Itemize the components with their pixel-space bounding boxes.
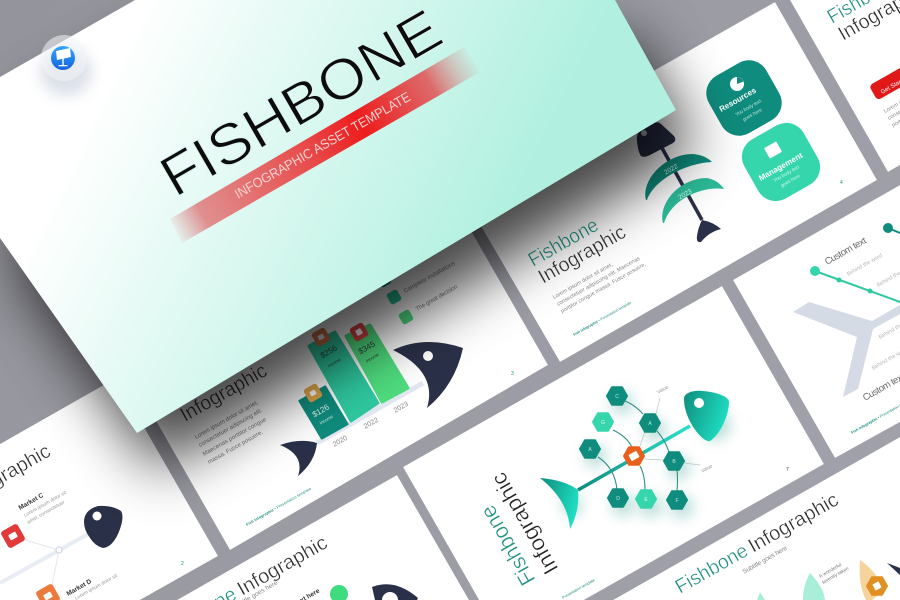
heading: fishbone infographic: Infographic <box>535 221 630 288</box>
heading: fishbone: Fishbone <box>672 540 752 598</box>
management description: You body text <box>772 164 801 184</box>
peach fin <box>860 560 885 600</box>
mint fin large <box>803 573 825 600</box>
text block: bar chart lorem: consectetuer adipiscing elit. <box>198 408 264 449</box>
check text: the great decision: The great decision <box>415 284 459 313</box>
behind the word labels: Behind the word <box>846 253 884 278</box>
heading: bottom slide infographic: Infographic <box>234 532 331 600</box>
bar 2020 <box>300 383 347 438</box>
text block: bar chart lorem <box>194 400 268 466</box>
panel: slide 2 markets <box>0 378 218 600</box>
teal branch <box>883 223 900 233</box>
bar 2023 <box>346 322 408 402</box>
fish head <box>84 506 122 548</box>
icon: 2022 <box>312 328 330 346</box>
footer: Fish Infographic • Presentation template <box>573 301 632 337</box>
management label: Management <box>757 151 805 183</box>
description: serenity taken <box>821 566 850 586</box>
panel: slide top right get started <box>790 0 900 172</box>
fish eye <box>641 130 647 136</box>
check item 3 <box>398 309 414 325</box>
hexagon d <box>608 489 628 507</box>
income 2020: income <box>319 414 334 425</box>
resources label: Resources <box>718 86 758 114</box>
icon: 2020 <box>304 384 322 402</box>
hexagon g light: G <box>601 420 605 426</box>
value 126: $126 <box>311 402 331 419</box>
hexagon a left <box>580 440 600 458</box>
footer: Presentation template <box>562 578 596 600</box>
label 2023: 2023 <box>677 188 694 201</box>
icon: 2023 <box>349 322 369 342</box>
fish head <box>393 342 463 408</box>
heading: fishbone infographic: Fishbone <box>525 214 602 271</box>
fish eye <box>92 512 102 520</box>
hexagon f: F <box>675 498 679 504</box>
text block: lorem ipsum: porttitor congue massa. Fusce posuere, <box>560 261 648 315</box>
page number 4: 4 <box>840 180 843 186</box>
resources description: goes here <box>742 107 764 123</box>
fish head <box>684 391 729 441</box>
footer: Fish Infographic • Presentation template <box>246 487 312 527</box>
subtitle: Subtitle goes here <box>742 545 789 576</box>
panel: slide 7 hexagon fishbone <box>403 286 824 600</box>
green branch <box>810 266 900 302</box>
fish head <box>372 584 418 600</box>
fish eye <box>423 351 433 361</box>
fish head <box>637 122 675 157</box>
heading: bar chart slide: Infographic <box>177 360 271 426</box>
hexagon b: B <box>672 459 676 465</box>
subtitle: INFOGRAPHIC ASSET TEMPLATE <box>232 89 413 202</box>
fish eye <box>694 398 704 408</box>
text block: bar chart lorem: Maecenas porttitor congue <box>202 417 268 458</box>
year labels: 2023 <box>393 401 410 415</box>
market d <box>35 573 119 600</box>
market c text: amet, consectetuer <box>26 499 66 526</box>
hexagon e light: E <box>644 497 648 503</box>
market c label: Market C <box>18 492 45 512</box>
value label top: Value <box>656 384 670 396</box>
fish skeleton <box>637 122 724 242</box>
hexagon e light <box>636 490 656 508</box>
hexagon a right <box>640 414 660 432</box>
hexagon d: D <box>616 496 620 502</box>
fish tail <box>540 478 578 529</box>
label 2022: 2022 <box>663 163 680 176</box>
text block: bar chart lorem: massa. Fusce posuere. <box>207 430 265 466</box>
icon: pie chart <box>730 77 744 91</box>
text block: lorem ipsum: consectetuer adipiscing elit. Maecenas <box>556 256 641 308</box>
title: FISHBONE <box>150 0 453 209</box>
value pointers <box>640 398 700 465</box>
year labels <box>332 401 410 449</box>
resources description: You body text <box>734 98 763 118</box>
orange hexagon icon <box>867 577 887 595</box>
hexagon f <box>667 491 687 509</box>
shadow of cover panel <box>20 38 696 471</box>
icon: market d <box>35 583 61 600</box>
fish tail <box>280 441 317 476</box>
value 256: $256 <box>319 343 339 360</box>
hexagon a right: A <box>648 421 652 427</box>
connector lines <box>25 540 59 586</box>
connector curves <box>598 401 678 491</box>
check item 1 <box>376 272 392 288</box>
icon: presentation board <box>764 141 782 159</box>
panel: slide 4 resources and management <box>456 2 877 362</box>
card: resources <box>706 60 782 136</box>
panel: bottom right slide <box>613 437 900 600</box>
red ribbon <box>170 47 480 243</box>
description: A wonderful <box>818 562 843 580</box>
page number 3: 3 <box>511 371 514 377</box>
button: get started <box>870 68 900 99</box>
hexagon a left: A <box>588 447 592 453</box>
value 345: $345 <box>357 339 377 356</box>
fish tail grey <box>793 302 900 397</box>
market c text: Lorem ipsum dolor sit <box>23 490 68 519</box>
page number 7: 7 <box>786 467 789 473</box>
hexagon c <box>607 387 627 405</box>
hexagon g light <box>593 413 613 431</box>
custom text top: Custom text <box>823 235 869 268</box>
income 2023: income <box>365 352 380 363</box>
card: management <box>742 122 820 202</box>
connector node <box>56 547 62 553</box>
year labels: 2022 <box>363 417 380 431</box>
text block: top right lorem <box>884 100 900 128</box>
value label right: Value <box>700 463 714 475</box>
hexagon c: C <box>615 394 619 400</box>
mint fin small <box>757 592 765 600</box>
checklist <box>376 261 459 325</box>
check item 2 <box>386 289 402 305</box>
fin 2022 <box>645 154 712 200</box>
market c <box>0 490 68 549</box>
navy fish head <box>887 563 900 575</box>
check text: complete installations: Complete installations <box>403 261 456 295</box>
panel: bottom slide list <box>158 475 469 600</box>
income 2022: income <box>327 357 342 368</box>
heading: vertical infographic: Infographic <box>486 468 563 579</box>
hexagon b <box>664 452 684 470</box>
panel: slide 3 bar chart fish <box>156 232 548 550</box>
management description: goes here <box>780 173 802 189</box>
text block: lorem ipsum: Lorem ipsum dolor sit amet, <box>552 262 614 301</box>
panel: slide custom text tail <box>733 185 900 458</box>
fish eye <box>382 592 398 600</box>
year labels: 2020 <box>332 435 349 449</box>
heading: infographic: Infographic <box>745 489 842 557</box>
hexagon shadows <box>562 392 730 518</box>
panel: cover <box>0 0 676 433</box>
fish spine <box>578 426 690 490</box>
heading: vertical fishbone: Fishbone <box>475 501 540 590</box>
icon: market c <box>0 523 26 549</box>
bar 2022 <box>309 327 378 421</box>
fin 2023 <box>662 178 724 223</box>
icon: keynote badge <box>40 35 92 96</box>
fish spine <box>662 148 702 220</box>
green circle <box>330 585 348 600</box>
market d label: Market D <box>66 578 93 598</box>
fish tail <box>697 220 721 242</box>
page number 2: 2 <box>181 561 184 567</box>
fish spine <box>0 532 92 583</box>
heading: bar chart slide: Fishbone <box>167 352 244 409</box>
behind the word labels <box>846 253 900 372</box>
axis band <box>317 383 423 443</box>
center hexagon orange <box>624 447 644 465</box>
text block: bar chart lorem: Lorem ipsum dolor sit amet, <box>194 400 260 441</box>
